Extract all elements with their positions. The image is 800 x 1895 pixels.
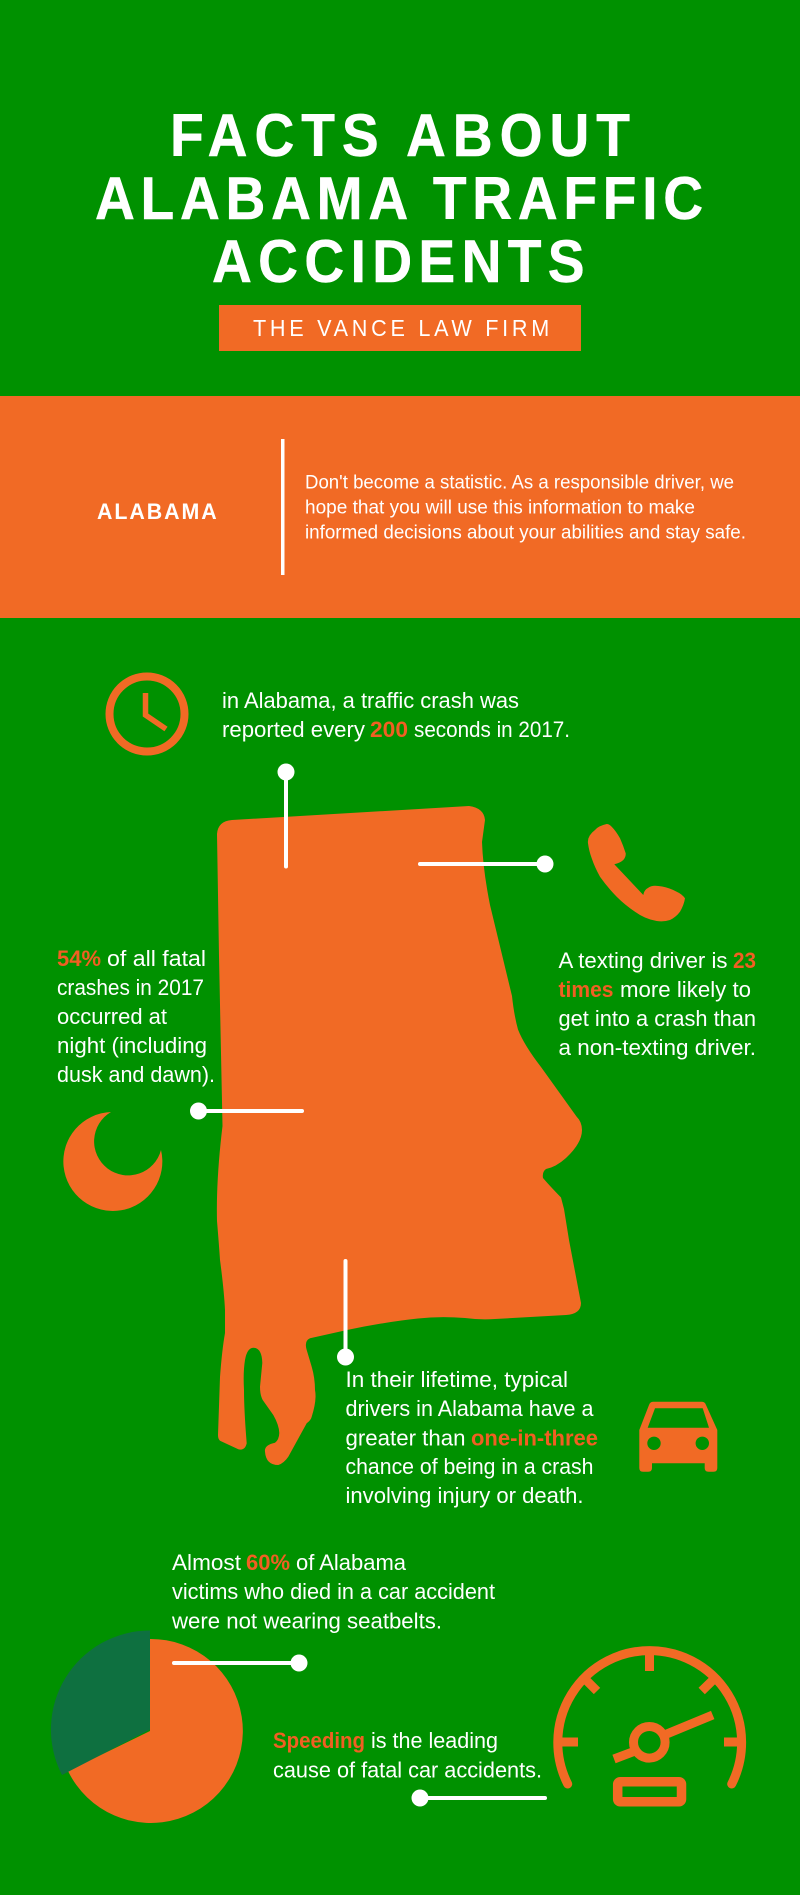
- icon: clock: [110, 676, 184, 752]
- text: seatbelts: of Alabama: [296, 1550, 407, 1575]
- text: crash every 200 seconds: reported every: [222, 717, 365, 742]
- text: one-in-three chance: chance of being in a crash: [346, 1454, 594, 1479]
- text: seatbelts: [171, 1550, 495, 1634]
- pie chart: seatbelts: [51, 1630, 243, 1823]
- panel: alabama intro band: hope that you will use this information to make: [305, 498, 695, 518]
- text: fatal crashes at night: 54%: [57, 946, 101, 971]
- icon: phone: [588, 824, 685, 921]
- text: fatal crashes at night: [57, 946, 215, 1087]
- text: seatbelts: Almost: [172, 1550, 241, 1575]
- text: texting driver: a non-texting driver.: [558, 1035, 756, 1060]
- text: fatal crashes at night: crashes in 2017: [57, 975, 204, 1000]
- text: one-in-three chance: one-in-three: [471, 1426, 598, 1450]
- text: speeding: [273, 1728, 542, 1782]
- panel: alabama intro band: [0, 396, 800, 618]
- panel: alabama intro band: ALABAMA: [97, 498, 217, 524]
- text: one-in-three chance: greater than: [346, 1426, 466, 1450]
- text: speeding: is the leading: [371, 1728, 498, 1753]
- icon: speedometer: [558, 1651, 742, 1802]
- title: ALABAMA TRAFFIC: [95, 166, 703, 233]
- panel: alabama intro band: informed decisions about your abilities and stay safe.: [305, 522, 746, 544]
- icon: crescent moon: [63, 1112, 162, 1211]
- text: crash every 200 seconds: 200: [370, 717, 408, 742]
- text: one-in-three chance: In their lifetime, typical: [346, 1367, 568, 1392]
- text: seatbelts: victims who died in a car accident: [172, 1579, 495, 1604]
- text: seatbelts: were not wearing seatbelts.: [171, 1608, 442, 1634]
- text: fatal crashes at night: night (including: [57, 1033, 207, 1058]
- connector: car pin: [337, 1259, 354, 1366]
- title: ACCIDENTS: [212, 229, 585, 296]
- text: crash every 200 seconds: [222, 688, 570, 742]
- icon: car: [639, 1402, 717, 1472]
- text: crash every 200 seconds: seconds in 2017.: [414, 717, 570, 742]
- title: [95, 103, 703, 296]
- text: speeding: cause of fatal car accidents.: [273, 1758, 542, 1782]
- text: texting driver: 23: [733, 948, 756, 973]
- connector: speeding pin: [412, 1790, 547, 1806]
- text: one-in-three chance: [346, 1367, 598, 1508]
- text: texting driver: more likely to: [620, 977, 751, 1002]
- text: texting driver: get into a crash than: [558, 1006, 756, 1031]
- text: speeding: Speeding: [273, 1728, 365, 1753]
- text: fatal crashes at night: of all fatal: [107, 946, 206, 971]
- text: one-in-three chance: drivers in Alabama have a: [346, 1396, 594, 1421]
- panel: alabama intro band: Don't become a statistic. As a responsible driver, we: [305, 472, 734, 494]
- subtitle banner: the vance law firm: [219, 305, 581, 351]
- text: texting driver: [558, 948, 756, 1060]
- map: state of alabama: [217, 806, 582, 1465]
- connector: seatbelt pin: [172, 1654, 308, 1672]
- connector: phone pin: [418, 856, 554, 872]
- text: fatal crashes at night: occurred at: [57, 1004, 167, 1029]
- text: seatbelts: 60%: [246, 1550, 290, 1575]
- connector: clock pin: [278, 764, 294, 868]
- connector: night pin: [190, 1102, 304, 1120]
- text: texting driver: A texting driver is: [558, 948, 728, 973]
- text: texting driver: times: [558, 977, 614, 1002]
- text: crash every 200 seconds: in Alabama, a traffic crash was: [222, 688, 519, 713]
- title: FACTS ABOUT: [170, 103, 630, 170]
- subtitle banner: the vance law firm: THE VANCE LAW FIRM: [253, 315, 549, 341]
- text: fatal crashes at night: dusk and dawn).: [57, 1062, 215, 1087]
- text: one-in-three chance: involving injury or death.: [346, 1483, 584, 1508]
